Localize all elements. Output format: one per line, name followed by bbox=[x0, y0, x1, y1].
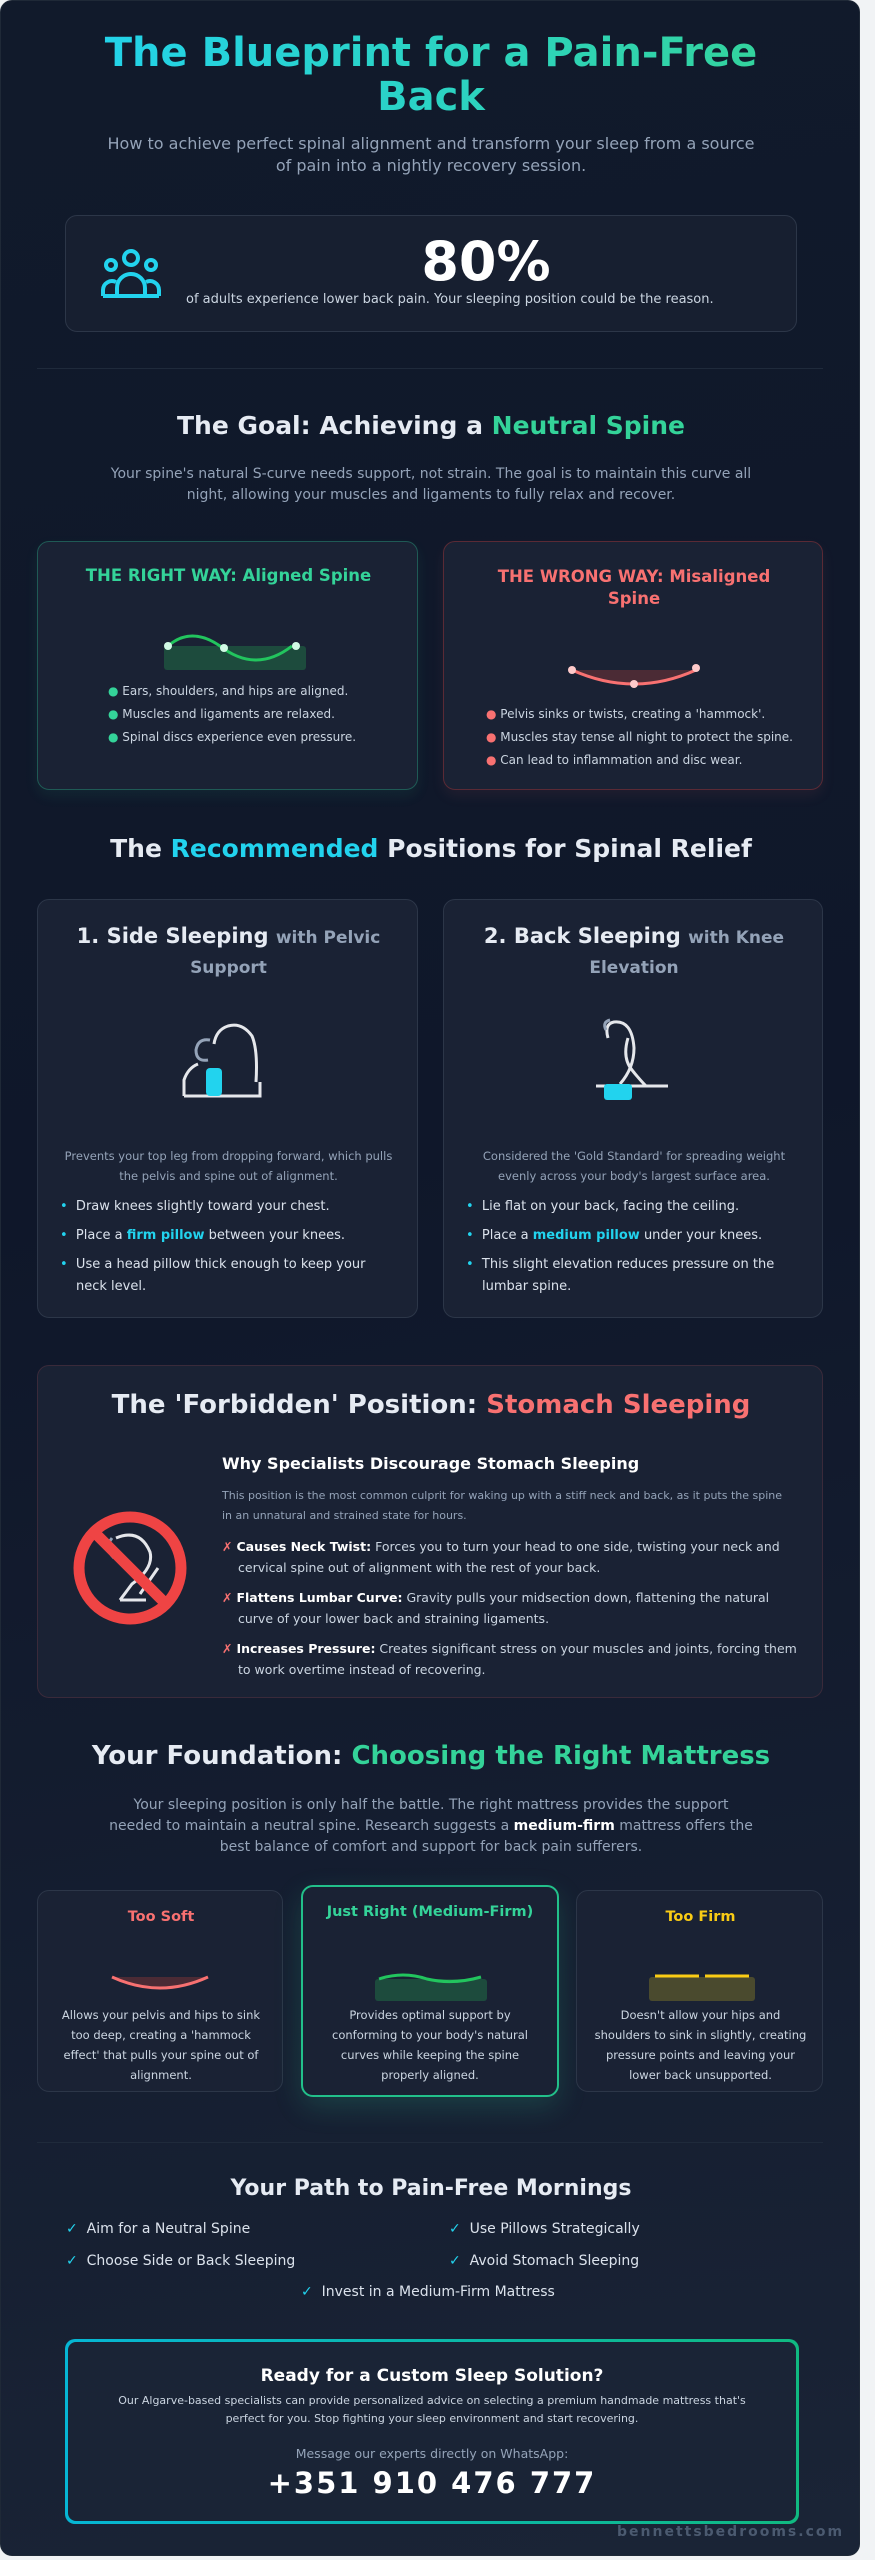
panel: wrong way bbox=[443, 541, 823, 790]
wrong way list bbox=[486, 707, 793, 767]
just right title: Just Right (Medium-Firm) bbox=[327, 1904, 533, 1920]
heading: goal: The Goal: Achieving a Neutral Spine bbox=[177, 411, 685, 440]
stat text: of adults experience lower back pain. Your sleeping position could be the reason. bbox=[186, 292, 714, 307]
heading: path: Your Path to Pain-Free Mornings bbox=[231, 2176, 631, 2201]
wrong way title: THE WRONG WAY: Misaligned Spine bbox=[498, 567, 770, 608]
subtitle: How to achieve perfect spinal alignment and transform your sleep from a source of pain into a nightly recovery session. bbox=[108, 134, 754, 175]
right way list: ● Spinal discs experience even pressure. bbox=[108, 730, 356, 744]
CTA box bbox=[65, 2339, 799, 2524]
panel: right way bbox=[37, 541, 418, 790]
side list bbox=[60, 1199, 366, 1294]
icon: no stomach sleeping bbox=[74, 1512, 186, 1624]
soft mattress graphic bbox=[111, 1976, 209, 1990]
heading: foundation: Your Foundation: Choosing the Right Mattress bbox=[92, 1741, 770, 1771]
right way title: THE RIGHT WAY: Aligned Spine bbox=[86, 566, 371, 585]
checklist: ✓ Invest in a Medium-Firm Mattress bbox=[301, 2284, 555, 2300]
footer brand: bennettsbedrooms.com bbox=[617, 2524, 844, 2540]
right way list: ● Ears, shoulders, and hips are aligned. bbox=[108, 684, 348, 698]
panel: just right bbox=[301, 1885, 559, 2097]
back list: • This slight elevation reduces pressure on the lumbar spine. bbox=[466, 1257, 774, 1294]
right way list: ● Muscles and ligaments are relaxed. bbox=[108, 707, 335, 721]
panel: forbidden position bbox=[37, 1365, 823, 1698]
medium mattress graphic bbox=[375, 1974, 487, 2001]
back list: • Lie flat on your back, facing the ceiling. bbox=[466, 1199, 739, 1214]
icon: people bbox=[101, 249, 161, 298]
title: The Blueprint for a Pain-Free Back bbox=[105, 30, 757, 120]
CTA message: Message our experts directly on WhatsApp: bbox=[296, 2446, 568, 2461]
wrong way list: ● Can lead to inflammation and disc wear. bbox=[486, 753, 742, 767]
icon: back sleeper bbox=[596, 1018, 668, 1100]
heading: recommended: The Recommended Positions for Spinal Relief bbox=[110, 834, 752, 863]
too soft title: Too Soft bbox=[128, 1909, 194, 1925]
stat box bbox=[65, 215, 797, 332]
reasons list: ✗ Increases Pressure: Creates significant stress on your muscles and joints, forcing them to work overtime instead of recovering. bbox=[222, 1641, 797, 1677]
reasons list bbox=[222, 1539, 797, 1677]
reasons list: ✗ Flattens Lumbar Curve: Gravity pulls your midsection down, flattening the natural curve of your lower back and straining ligaments. bbox=[222, 1590, 769, 1626]
too soft text: Allows your pelvis and hips to sink too deep, creating a 'hammock effect' that pulls your spine out of alignment. bbox=[62, 2008, 260, 2082]
foundation paragraph: Your sleeping position is only half the battle. The right mattress provides the support needed to maintain a neutral spine. Research suggests a medium-firm mattress offers the best balance of comfort and support for back pain sufferers. bbox=[109, 1797, 753, 1855]
right way list bbox=[108, 684, 356, 744]
reasons list: ✗ Causes Neck Twist: Forces you to turn your head to one side, twisting your neck and cervical spine out of alignment with the rest of your back. bbox=[222, 1539, 780, 1575]
just right text: Provides optimal support by conforming to your body's natural curves while keeping the spine properly aligned. bbox=[332, 2008, 528, 2082]
spine sagging graphic bbox=[568, 664, 700, 688]
spine aligned graphic bbox=[164, 634, 306, 670]
phone number: +351 910 476 777 bbox=[268, 2466, 596, 2500]
panel: too soft bbox=[37, 1890, 283, 2092]
too firm title: Too Firm bbox=[665, 1909, 736, 1925]
goal paragraph: Your spine's natural S-curve needs support, not strain. The goal is to maintain this curve all night, allowing your muscles and ligaments to fully relax and recover. bbox=[111, 466, 751, 503]
icon: side sleeper bbox=[182, 1024, 262, 1098]
wrong way list: ● Pelvis sinks or twists, creating a 'hammock'. bbox=[486, 707, 765, 721]
checklist: ✓ Aim for a Neutral Spine bbox=[66, 2221, 250, 2237]
checklist: ✓ Choose Side or Back Sleeping bbox=[66, 2253, 295, 2269]
forbidden heading: The 'Forbidden' Position: Stomach Sleeping bbox=[112, 1390, 750, 1420]
why heading: Why Specialists Discourage Stomach Sleeping bbox=[222, 1454, 639, 1473]
back title: 2. Back Sleeping with Knee Elevation bbox=[484, 924, 784, 978]
too firm text: Doesn't allow your hips and shoulders to sink in slightly, creating pressure points and leaving your lower back unsupported. bbox=[595, 2008, 806, 2082]
checklist: ✓ Use Pillows Strategically bbox=[449, 2221, 640, 2237]
wrong way list: ● Muscles stay tense all night to protect the spine. bbox=[486, 730, 793, 744]
checklist: ✓ Avoid Stomach Sleeping bbox=[449, 2253, 639, 2269]
stat number: 80% bbox=[421, 230, 551, 293]
side list: • Draw knees slightly toward your chest. bbox=[60, 1199, 330, 1214]
back list: • Place a medium pillow under your knees. bbox=[466, 1228, 762, 1243]
back description: Considered the 'Gold Standard' for spreading weight evenly across your body's largest surface area. bbox=[483, 1149, 785, 1183]
panel: back sleeping bbox=[443, 899, 823, 1318]
CTA title: Ready for a Custom Sleep Solution? bbox=[261, 2366, 603, 2386]
panel: side sleeping bbox=[37, 899, 418, 1318]
why paragraph: This position is the most common culprit for waking up with a stiff neck and back, as it puts the spine in an unnatural and strained state for hours. bbox=[222, 1489, 782, 1522]
side list: • Place a firm pillow between your knees. bbox=[60, 1228, 345, 1243]
side title: 1. Side Sleeping with Pelvic Support bbox=[77, 924, 380, 978]
checklist bbox=[66, 2221, 640, 2300]
firm mattress graphic bbox=[649, 1974, 755, 2001]
side description: Prevents your top leg from dropping forward, which pulls the pelvis and spine out of alignment. bbox=[65, 1149, 392, 1183]
CTA text: Our Algarve-based specialists can provide personalized advice on selecting a premium handmade mattress that's perfect for you. Stop fighting your sleep environment and start recovering. bbox=[118, 2394, 746, 2425]
back list bbox=[466, 1199, 774, 1294]
panel: too firm bbox=[576, 1890, 823, 2092]
side list: • Use a head pillow thick enough to keep your neck level. bbox=[60, 1257, 366, 1294]
